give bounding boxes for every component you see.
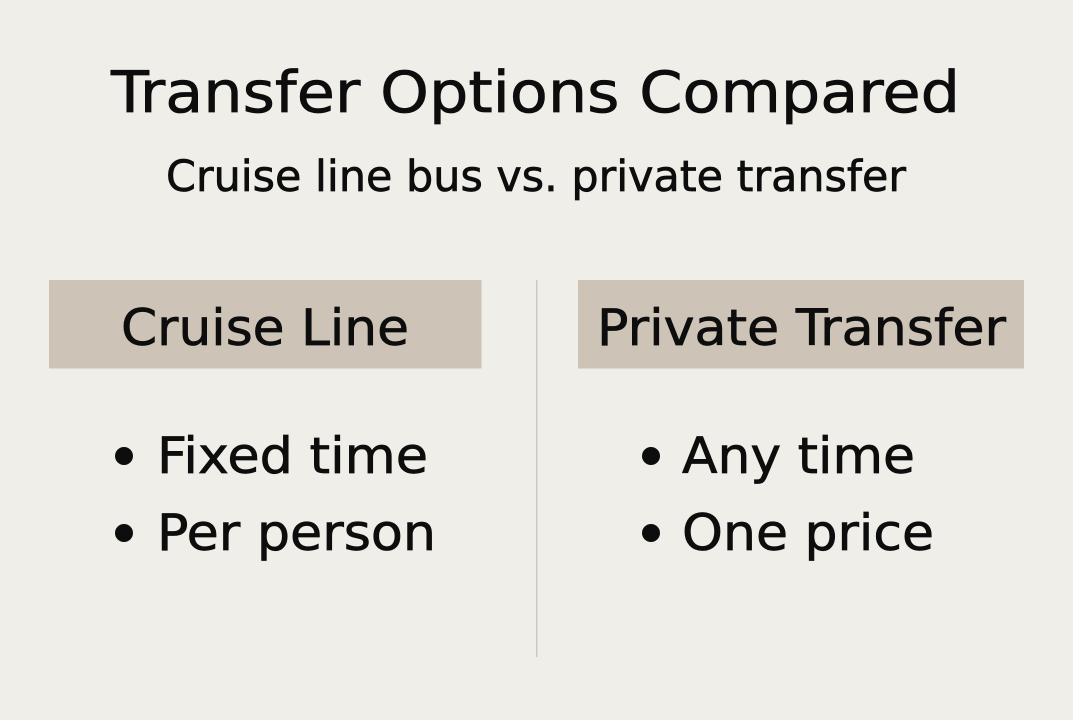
title: Transfer Options Compared (110, 60, 960, 126)
header: private transfer: Private Transfer (597, 299, 1006, 357)
header: cruise line (49, 280, 482, 368)
header: private transfer (578, 280, 1024, 368)
bullet: any time: Any time (682, 427, 915, 485)
subtitle: Cruise line bus vs. private transfer (166, 152, 906, 202)
panel: private transfer (578, 280, 1024, 562)
header: cruise line: Cruise Line (121, 299, 409, 357)
bullet: per person: Per person (157, 504, 436, 562)
bullet: fixed time: Fixed time (157, 427, 428, 485)
bullet: one price: One price (682, 504, 934, 562)
panel: cruise line (49, 280, 482, 562)
